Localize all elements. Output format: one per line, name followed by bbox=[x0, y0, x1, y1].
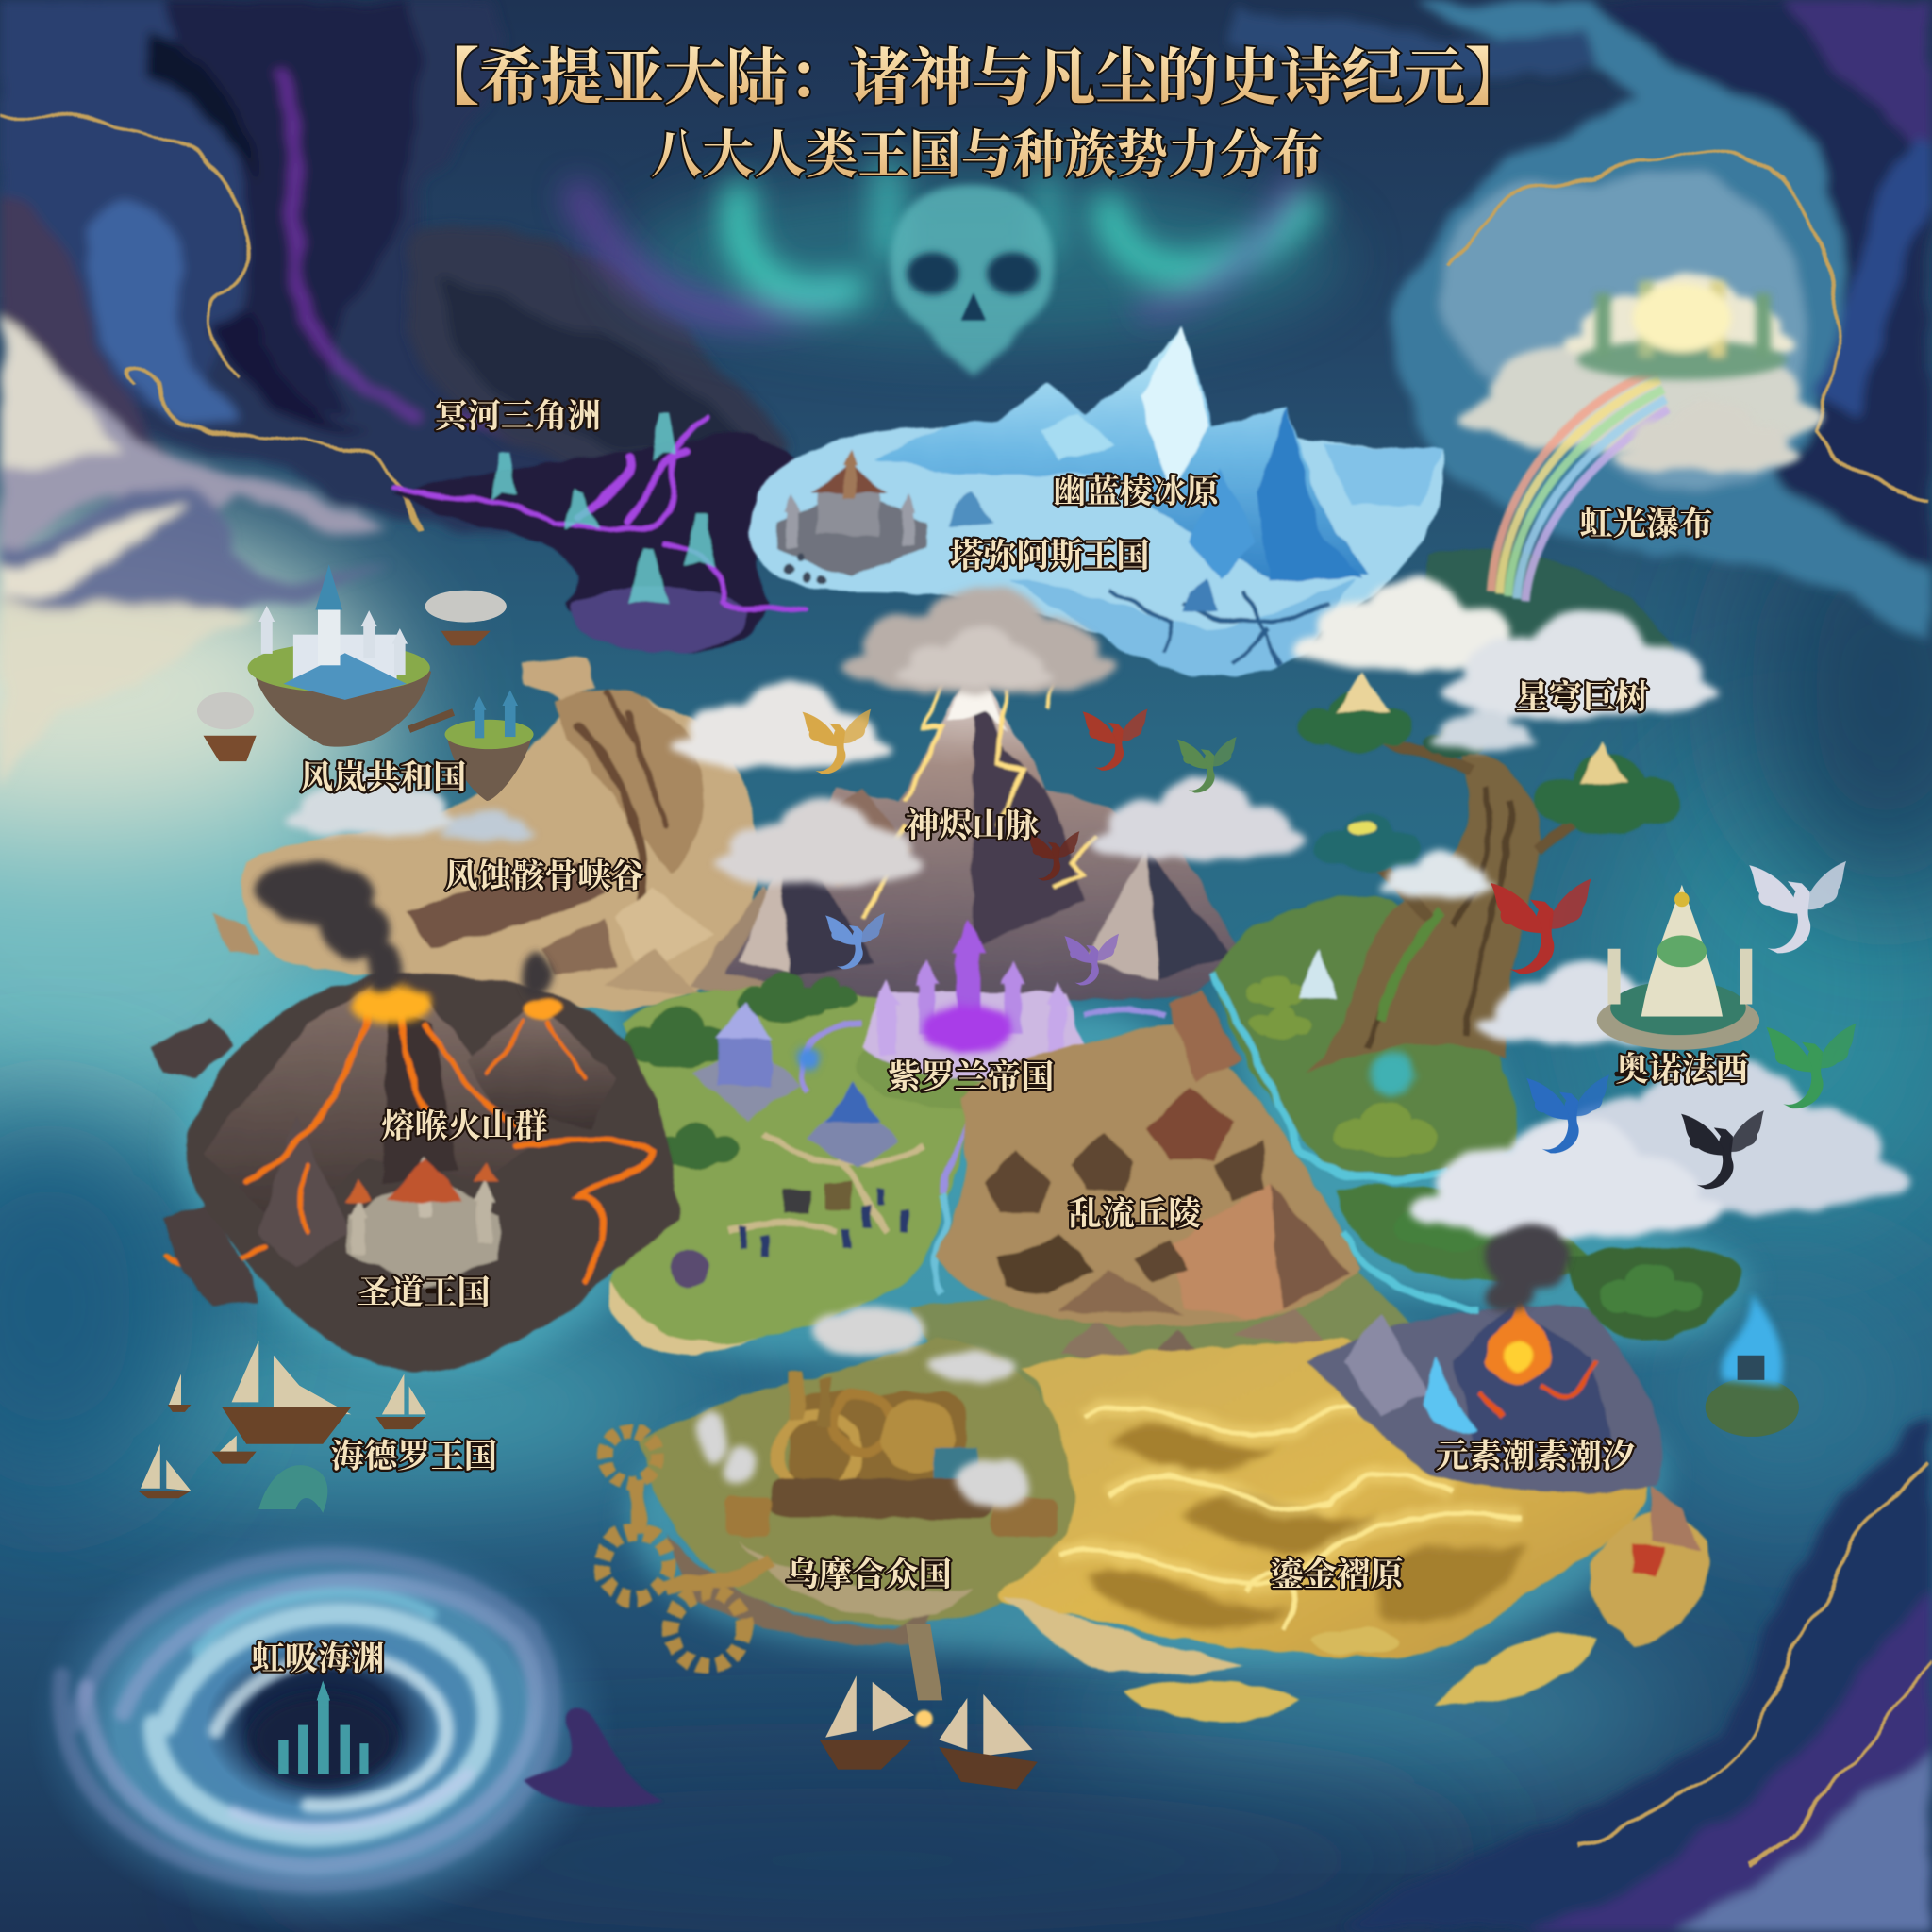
icon: sunken city bbox=[278, 1681, 369, 1774]
icon: star vault tree bbox=[1300, 672, 1681, 1072]
icon: dragon citadel bbox=[1597, 885, 1759, 1050]
swirling storm border: upper right bbox=[1232, 0, 1932, 641]
label: rainbow falls: 虹光瀑布 bbox=[1579, 506, 1712, 542]
dragons bbox=[802, 708, 1857, 1189]
label: wind republic: 风岚共和国 bbox=[300, 759, 466, 796]
label: divine flame mountains: 神烬山脉 bbox=[906, 808, 1039, 844]
label: elemental tides: 元素潮素潮汐 bbox=[1436, 1439, 1635, 1475]
lava flows bbox=[166, 1008, 653, 1281]
icon: battling ships bbox=[820, 1624, 1038, 1789]
icon: ramshackle huts bbox=[986, 989, 1263, 1293]
subtitle: 八大人类王国与种族势力分布 bbox=[651, 126, 1324, 184]
sand dunes bbox=[1084, 1424, 1528, 1629]
icon: rainbow waterfall and sky citadel bbox=[1491, 281, 1799, 601]
continental land base bbox=[912, 1269, 1454, 1516]
icon: treasure islet bbox=[1589, 1485, 1707, 1645]
gold veins: lower right bbox=[1577, 1466, 1932, 1860]
sandbars and isles bbox=[1122, 1629, 1595, 1723]
coastal shallows bbox=[178, 937, 1750, 1668]
icon: skull bbox=[891, 185, 1054, 375]
region: steampunk republic island bbox=[601, 1337, 1084, 1666]
icon: brass cogs bbox=[601, 1430, 770, 1666]
region: divine flame mountains bbox=[727, 665, 1244, 1004]
region: turbulent hills bbox=[937, 989, 1361, 1326]
label: holy kingdom: 圣道王国 bbox=[358, 1274, 491, 1311]
label: star vault tree: 星穹巨树 bbox=[1516, 679, 1649, 716]
label: frozen plain: 幽蓝棱冰原 bbox=[1053, 474, 1221, 510]
abyssal serpent bbox=[524, 1708, 663, 1807]
label: siphon abyss: 虹吸海渊 bbox=[251, 1641, 384, 1677]
label: violet empire: 紫罗兰帝国 bbox=[888, 1058, 1054, 1095]
icon: blue fort bbox=[692, 1004, 899, 1168]
tree canopies bbox=[1300, 691, 1681, 871]
gold vein: upper right bbox=[1441, 158, 1932, 506]
region: Stygian delta bbox=[394, 414, 813, 652]
aurora and ghostly skull bbox=[579, 173, 1343, 375]
elemental smoke bbox=[1486, 1224, 1570, 1311]
region: elemental peaks bbox=[1306, 1296, 1662, 1492]
ghosts bbox=[491, 414, 716, 605]
army troops bbox=[671, 1183, 908, 1289]
label: bone canyon: 风蚀骸骨峡谷 bbox=[445, 858, 645, 894]
icon: elemental portal islet bbox=[1706, 1293, 1799, 1437]
label: Stygian delta: 冥河三角洲 bbox=[434, 398, 601, 435]
region: green kingdom lowlands bbox=[609, 973, 986, 1356]
region: gilded sand plain bbox=[999, 1337, 1707, 1723]
label: molten volcano group: 熔喉火山群 bbox=[380, 1108, 548, 1145]
volcanic smoke bbox=[255, 861, 548, 998]
title bbox=[418, 44, 1526, 184]
region: maelstrom abyss bbox=[27, 1516, 663, 1932]
label: Onofasi: 奥诺法西 bbox=[1615, 1051, 1748, 1088]
region: frozen plain with ice peaks bbox=[751, 326, 1444, 677]
rainbow falls clouds bbox=[1295, 579, 1719, 897]
map labels bbox=[251, 398, 1748, 1677]
region: Hydro kingdom fleet bbox=[138, 1341, 426, 1513]
citadel cloud bank bbox=[1460, 274, 1824, 451]
region: wind republic floating islands bbox=[197, 564, 534, 843]
icon: Tamias castle bbox=[776, 450, 926, 584]
region: Onofasi cloud realm bbox=[802, 708, 1909, 1239]
swirling storm border: lower right bbox=[1343, 1417, 1932, 1932]
main heading: 【希提亚大陆：诸神与凡尘的史诗纪元】 bbox=[418, 44, 1526, 112]
icon: airships bbox=[197, 591, 507, 761]
region: world tree forest bbox=[1214, 548, 1740, 1341]
label: Umo federation: 乌摩合众国 bbox=[786, 1557, 952, 1593]
label: gilded plain: 鎏金褶原 bbox=[1271, 1557, 1405, 1593]
outlying rocks bbox=[150, 1018, 257, 1306]
dark smoke over the delta bbox=[406, 225, 789, 492]
region: violet empire castle bbox=[794, 919, 1164, 1293]
label: Tamias kingdom: 塔弥阿斯王国 bbox=[950, 538, 1150, 575]
region: wind-eroded canyon bbox=[212, 658, 862, 1011]
icon: great brass engine bbox=[724, 1370, 1056, 1537]
region: volcano island bbox=[150, 974, 678, 1372]
icon: white spired castle bbox=[258, 564, 518, 738]
swirling storm border: upper left bbox=[0, 0, 759, 789]
label: turbulent hills: 乱流丘陵 bbox=[1068, 1195, 1201, 1232]
label: Hydro kingdom: 海德罗王国 bbox=[331, 1439, 497, 1475]
gold veins: upper left bbox=[0, 117, 419, 530]
factory steam bbox=[697, 1306, 1029, 1509]
thunder clouds bbox=[672, 585, 1306, 885]
icon: holy kingdom citadel bbox=[345, 1156, 499, 1288]
